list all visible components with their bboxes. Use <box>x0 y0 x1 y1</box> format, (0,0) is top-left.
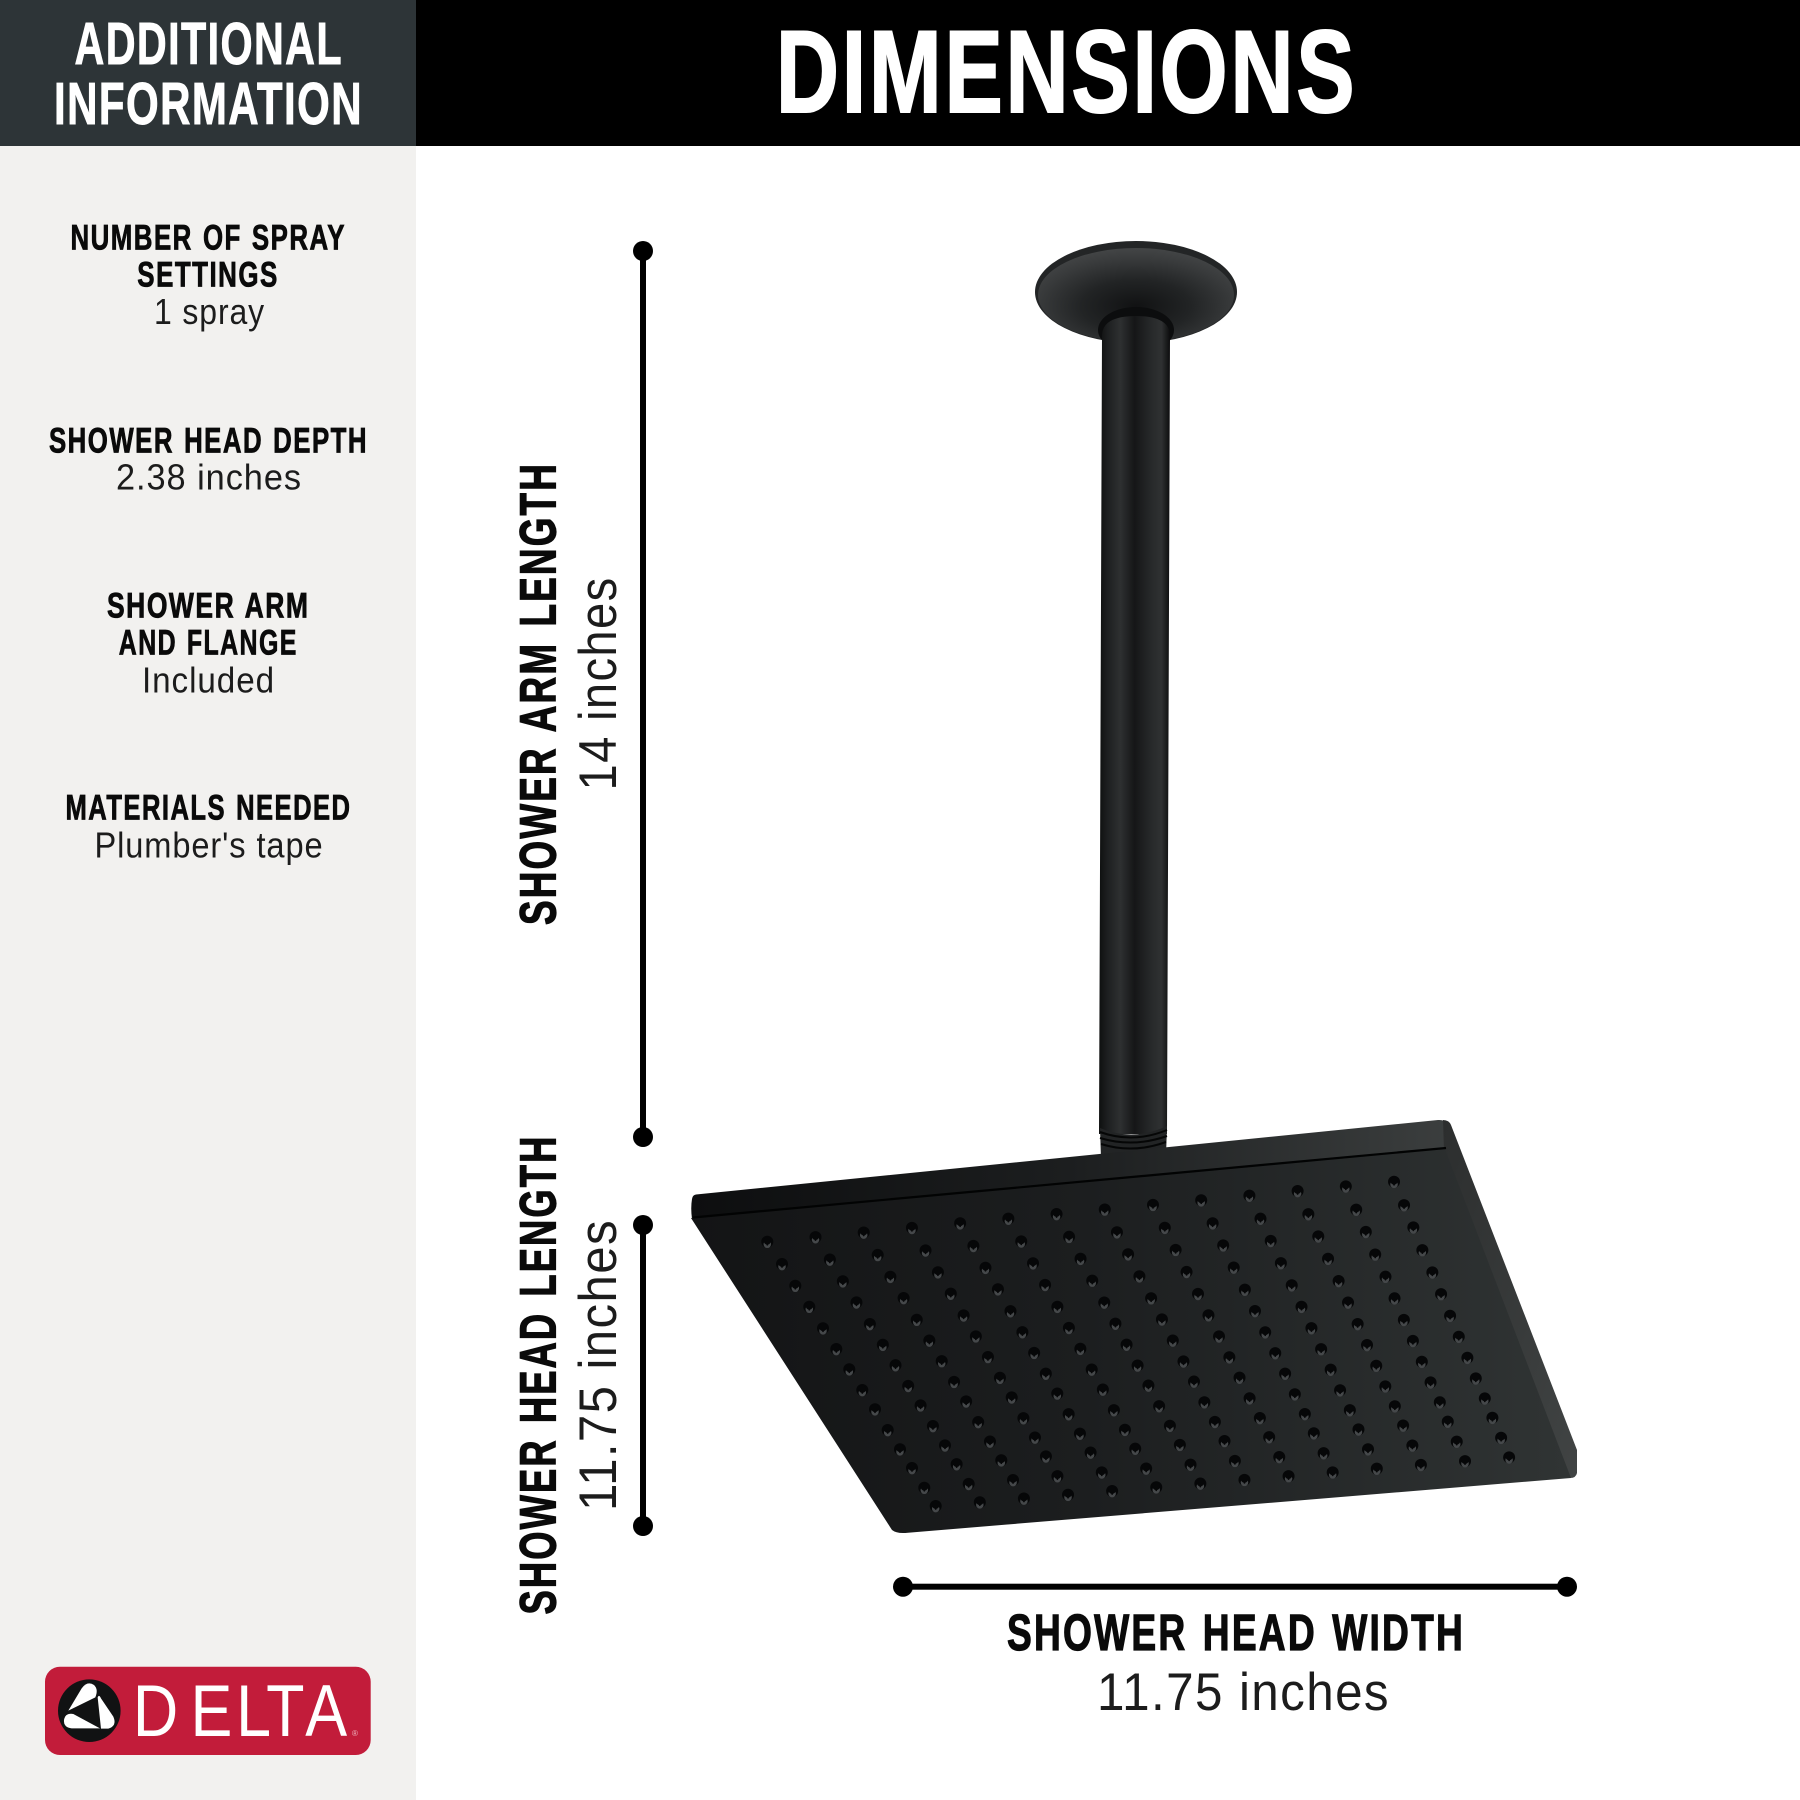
measure line: length <box>633 1215 653 1536</box>
shower head right side <box>1443 1120 1577 1478</box>
shower head top edge <box>691 1120 1447 1219</box>
dimension: shower arm length <box>510 241 653 1147</box>
spec: number of spray settings: 1 spray <box>154 291 265 332</box>
spec: shower head depth: 2.38 inches <box>116 456 302 497</box>
panel: additional information sidebar <box>0 0 416 1800</box>
logo: Delta: ® <box>352 1729 358 1738</box>
shower arm flange <box>1035 241 1237 353</box>
dimension: shower head width: 11.75 inches <box>1097 1663 1390 1722</box>
measure line: arm <box>633 241 653 1147</box>
icon: Delta triangle blades <box>64 1683 115 1729</box>
dimension: shower head width: SHOWER HEAD WIDTH <box>1007 1604 1465 1661</box>
threaded collar <box>1100 1126 1167 1158</box>
spec: shower head depth: SHOWER HEAD DEPTH <box>49 421 368 460</box>
logo: Delta: DELTA <box>133 1671 348 1752</box>
spec: materials needed: Plumber's tape <box>94 824 324 865</box>
spec: shower arm and flange: Included <box>142 659 275 700</box>
spec: materials needed: MATERIALS NEEDED <box>66 788 352 827</box>
logo: Delta <box>45 1667 371 1755</box>
title bar <box>416 0 1800 146</box>
spec: number of spray settings: SETTINGS <box>137 256 279 295</box>
measure line: width <box>893 1577 1577 1597</box>
spec: shower arm and flange <box>107 586 310 700</box>
sidebar header: INFORMATION <box>54 71 363 137</box>
shower arm pipe <box>1099 316 1170 1158</box>
spec: shower arm and flange: SHOWER ARM <box>107 586 310 625</box>
shower head <box>691 1120 1577 1533</box>
sidebar header <box>0 0 416 146</box>
dimension: shower head width <box>893 1577 1577 1722</box>
title bar: DIMENSIONS <box>776 6 1358 137</box>
spec: number of spray settings: NUMBER OF SPRAY <box>70 218 346 257</box>
dimension: shower head length: 11.75 inches <box>569 1219 628 1511</box>
dimension: shower arm length: 14 inches <box>569 576 628 790</box>
dimension: shower arm length: SHOWER ARM LENGTH <box>510 462 567 925</box>
dimension: shower head length: SHOWER HEAD LENGTH <box>510 1134 567 1614</box>
spec: materials needed <box>66 788 352 865</box>
shower head spray face <box>691 1149 1571 1533</box>
spray nozzles <box>767 1181 1510 1509</box>
spec: shower head depth <box>49 421 368 497</box>
spec: shower arm and flange: AND FLANGE <box>119 624 298 663</box>
sidebar header: ADDITIONAL <box>74 11 343 77</box>
spec: number of spray settings <box>70 218 346 332</box>
dimension: shower head length <box>510 1134 653 1614</box>
